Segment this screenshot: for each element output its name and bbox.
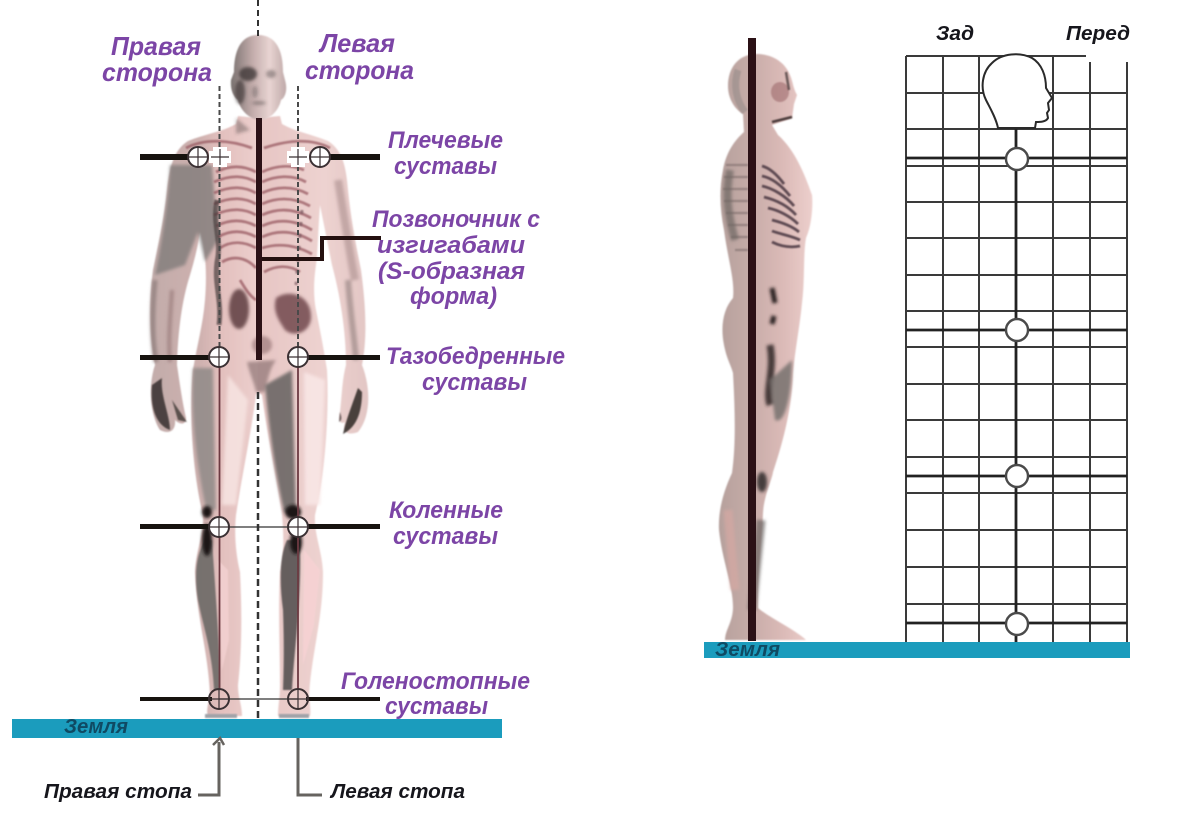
- shading: hands: [152, 378, 362, 434]
- ground bar: front view: [12, 716, 502, 738]
- joint level lines: [906, 129, 1127, 642]
- label: shoulder joints: суставы: [394, 153, 497, 180]
- label: knee joints: [389, 497, 503, 550]
- label: spine: изгигабами: [377, 232, 525, 259]
- spine line with leader to label: [259, 118, 381, 360]
- side shading: back ribs: [723, 165, 748, 250]
- ground label: Земля: [64, 716, 128, 738]
- label: knee joints: суставы: [393, 523, 498, 550]
- label: ankle joints: [341, 668, 530, 720]
- arrow: right foot: [198, 738, 224, 795]
- heading: left side: [305, 28, 414, 85]
- side plumb line: [748, 38, 756, 641]
- labels: back and front: Перед: [1066, 23, 1130, 45]
- plumb lines: centre and side dashed lines: [219, 0, 298, 720]
- label: spine: (S-образная: [378, 258, 525, 285]
- grid joint markers: [1006, 148, 1028, 635]
- label: ankle joints: суставы: [385, 693, 488, 720]
- label: ankle joints: Голеностопные: [341, 668, 530, 695]
- head: [231, 35, 286, 120]
- side shading: body: [728, 170, 792, 610]
- label: shoulder joints: [388, 127, 503, 180]
- joint levels: horizontal bars: [140, 154, 380, 701]
- shading: lower legs: [196, 540, 320, 690]
- arrow: left foot: [298, 738, 322, 795]
- labels: back and front: Зад: [936, 23, 974, 45]
- labels: back and front: [936, 23, 1130, 45]
- label: shoulder joints: Плечевые: [388, 127, 503, 154]
- figure: side view of the body: [719, 38, 812, 641]
- body silhouette: [150, 116, 368, 716]
- ground label: Земля: [715, 639, 780, 661]
- shading: pelvis: [229, 289, 311, 392]
- label: hip joints: Тазобедренные: [386, 343, 565, 370]
- grid lines: [906, 56, 1127, 642]
- label: spine: [372, 206, 540, 310]
- heading: right side: Правая: [111, 31, 201, 61]
- posture grid: [906, 54, 1127, 642]
- label: knee joints: Коленные: [389, 497, 503, 524]
- ground bar: side view: [704, 639, 1130, 661]
- label: spine: форма): [410, 283, 497, 310]
- joint markers: [188, 147, 330, 709]
- side silhouette: [719, 54, 812, 640]
- side ribs: [762, 166, 800, 247]
- heading: left side: сторона: [305, 55, 414, 85]
- shading: thighs: [192, 368, 325, 512]
- side shading: face: [736, 70, 792, 122]
- label: right foot: Правая стопа: [44, 781, 192, 803]
- heading: right side: [102, 31, 212, 87]
- facial shadows: [235, 67, 276, 134]
- spine shadow at left dashed line: [216, 200, 302, 325]
- shading: left upper arm and flank: [153, 165, 356, 362]
- skeleton: ribs: [186, 141, 330, 300]
- label: spine: Позвоночник с: [372, 206, 540, 233]
- label: left foot: Левая стопа: [329, 781, 465, 803]
- label: hip joints: суставы: [422, 369, 527, 396]
- head outline: [983, 54, 1052, 128]
- feet toes: [205, 714, 309, 718]
- figure: front view of the body: [150, 35, 368, 716]
- heading: right side: сторона: [102, 57, 212, 87]
- label: hip joints: [386, 343, 565, 396]
- heading: left side: Левая: [318, 28, 395, 58]
- shading: knees: [202, 505, 302, 556]
